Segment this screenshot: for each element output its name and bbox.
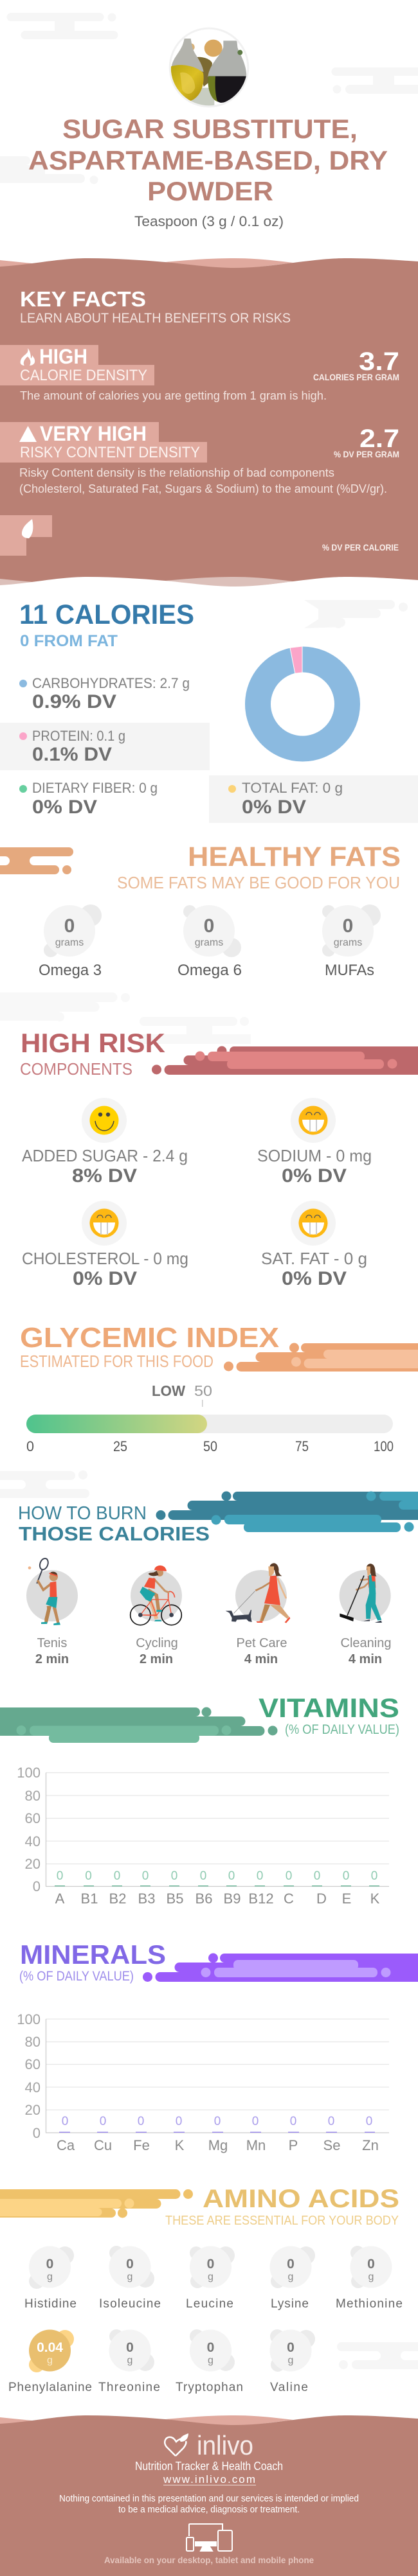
subheading: healthy fats: SOME FATS MAY BE GOOD FOR YOU xyxy=(117,873,400,892)
stat: dv per gram: 2.7 xyxy=(359,425,399,453)
bar chart: minerals: Mn xyxy=(246,2137,266,2153)
amino: tryptophan: Tryptophan xyxy=(176,2381,243,2394)
fat: omega 3 xyxy=(39,904,102,979)
amino: phenylalanine: 0.04 xyxy=(37,2340,63,2355)
fat: omega 6: Omega 6 xyxy=(177,962,242,979)
amino: tryptophan: 0 xyxy=(207,2340,214,2355)
activity: tennis: Tenis xyxy=(37,1636,67,1650)
legend: dietary fiber: 0% DV xyxy=(32,797,97,818)
bar chart: vitamins: 0 xyxy=(228,1869,235,1883)
bar chart: vitamins: K xyxy=(370,1891,380,1907)
title: POWDER xyxy=(147,176,273,206)
activity: tennis: 2 min xyxy=(35,1652,69,1666)
background decoration: high risk clouds xyxy=(0,992,251,1044)
glycemic value label: 50 xyxy=(194,1382,212,1399)
bar chart: minerals: 0 xyxy=(33,2125,41,2141)
background decoration: amino cloud xyxy=(337,2342,418,2369)
decoration: minerals bars xyxy=(143,1953,418,1982)
amino: histidine: Histidine xyxy=(24,2297,77,2311)
icon: woman walking dog xyxy=(226,1563,290,1623)
legend: total fat: TOTAL FAT: 0 g xyxy=(242,780,343,796)
legend: protein: 0.1% DV xyxy=(32,744,112,765)
logo: heart with leaf xyxy=(165,2433,188,2456)
amino: threonine: 0 xyxy=(126,2340,134,2355)
decoration: glycemic bars xyxy=(224,1343,418,1372)
heading: key facts: KEY FACTS xyxy=(20,287,146,311)
panel: footer xyxy=(0,2415,418,2576)
bar chart: minerals: 0 xyxy=(252,2115,259,2128)
risky content badge xyxy=(0,422,207,463)
bar chart: vitamins: B5 xyxy=(167,1891,183,1907)
bar chart: minerals: 80 xyxy=(25,2034,41,2050)
bar chart: vitamins: B3 xyxy=(138,1891,155,1907)
disclaimer: Nothing contained in this presentation and our services is intended or implied xyxy=(59,2493,359,2504)
text: risky content explanation: (Cholesterol, Saturated Fat, Sugars & Sodium) to the amount (%DV/gr). xyxy=(19,482,387,495)
bar chart: vitamins: 0 xyxy=(114,1869,120,1883)
heading: healthy fats: HEALTHY FATS xyxy=(188,842,401,872)
bar chart: vitamins: D xyxy=(316,1891,327,1907)
decoration: vitamins bars xyxy=(0,1707,278,1743)
icon: woman sweeping xyxy=(340,1564,391,1623)
icon: leaf xyxy=(22,519,33,538)
subheading: vitamins: (% OF DAILY VALUE) xyxy=(285,1722,399,1737)
logo wordmark: inlivo xyxy=(197,2430,253,2460)
legend: carbohydrates: CARBOHYDRATES: 2.7 g xyxy=(32,675,190,691)
amino: valine: g xyxy=(288,2355,293,2366)
icon: cyclist xyxy=(131,1566,182,1625)
calorie density badge xyxy=(0,345,154,385)
disclaimer xyxy=(59,2493,359,2515)
bar chart: vitamins: 0 xyxy=(371,1869,377,1883)
bar chart: vitamins: A xyxy=(55,1891,65,1907)
stat: dv per gram: % DV PER GRAM xyxy=(334,449,399,459)
amino: methionine xyxy=(336,2246,403,2311)
bar chart: vitamins: B12 xyxy=(248,1891,274,1907)
label: calorie density: CALORIE DENSITY xyxy=(20,367,147,384)
glycemic scale labels: 50 xyxy=(203,1438,217,1454)
third badge with leaf icon xyxy=(0,515,52,556)
heading: high risk: HIGH RISK xyxy=(21,1028,165,1058)
risk item: cholesterol: CHOLESTEROL - 0 mg xyxy=(22,1249,188,1268)
amino: isoleucine: Isoleucine xyxy=(99,2297,161,2311)
bar chart: minerals: Ca xyxy=(57,2137,75,2153)
glycemic value label: LOW xyxy=(152,1382,185,1399)
amino: methionine: 0 xyxy=(367,2257,375,2272)
stat: calories per gram: CALORIES PER GRAM xyxy=(313,372,399,382)
bar chart: vitamins: 0 xyxy=(171,1869,177,1883)
bar chart: minerals: Zn xyxy=(362,2137,379,2153)
serving size: Teaspoon (3 g / 0.1 oz) xyxy=(134,213,284,229)
glycemic value label xyxy=(152,1382,212,1407)
amino: isoleucine: 0 xyxy=(126,2257,134,2272)
bar chart: minerals: 20 xyxy=(25,2102,41,2118)
stat: calories per gram xyxy=(313,348,399,382)
subheading: from fat: 0 FROM FAT xyxy=(20,632,118,650)
activity: cleaning: 4 min xyxy=(349,1652,382,1666)
legend: protein xyxy=(0,723,210,770)
decoration: healthy fats bars xyxy=(0,847,73,874)
bar chart: minerals: K xyxy=(175,2137,185,2153)
risk item: added sugar: 8% DV xyxy=(72,1165,137,1187)
amino: isoleucine xyxy=(99,2246,161,2311)
amino: isoleucine: g xyxy=(127,2272,132,2282)
heading: amino acids: AMINO ACIDS xyxy=(203,2185,399,2213)
label: very high: VERY HIGH xyxy=(40,422,147,445)
risk item: cholesterol xyxy=(22,1201,188,1289)
fat: omega 3: Omega 3 xyxy=(39,962,102,979)
donut chart xyxy=(258,646,347,749)
risk item: saturated fat: 0% DV xyxy=(282,1268,347,1289)
heading: those calories: THOSE CALORIES xyxy=(19,1522,210,1545)
bar chart: minerals: 40 xyxy=(25,2079,41,2095)
label: risky content density: RISKY CONTENT DENSITY xyxy=(20,444,200,461)
legend: carbohydrates xyxy=(19,675,190,712)
activity: tennis xyxy=(26,1557,78,1666)
amino: methionine: g xyxy=(368,2272,374,2282)
decoration: burn bars xyxy=(156,1492,418,1532)
amino: lysine: g xyxy=(288,2272,293,2282)
amino: threonine: Threonine xyxy=(98,2381,160,2394)
text: risky content explanation: Risky Content density is the relationship of bad components xyxy=(19,466,334,479)
tagline: Nutrition Tracker & Health Coach xyxy=(135,2460,283,2473)
label: high: HIGH xyxy=(39,345,87,368)
legend: dietary fiber xyxy=(19,780,158,818)
decoration: amino acid bars xyxy=(0,2189,193,2218)
bar chart: vitamins: 80 xyxy=(25,1788,41,1804)
bar chart: minerals: 0 xyxy=(138,2115,144,2128)
amino: phenylalanine: Phenylalanine xyxy=(8,2381,92,2394)
background decoration: calories cloud xyxy=(304,600,408,628)
heading: glycemic index: GLYCEMIC INDEX xyxy=(20,1322,279,1354)
bar chart: minerals: 0 xyxy=(100,2115,106,2128)
glycemic scale labels xyxy=(26,1438,394,1454)
bar chart: minerals: 0 xyxy=(62,2115,68,2128)
subheading: minerals: (% OF DAILY VALUE) xyxy=(19,1969,134,1984)
availability note: Available on your desktop, tablet and mobile phone xyxy=(104,2555,314,2565)
activity: pet care: Pet Care xyxy=(237,1636,287,1650)
bar chart: minerals: 0 xyxy=(366,2115,372,2128)
amino: tryptophan xyxy=(176,2329,243,2394)
bar chart: minerals: 100 xyxy=(17,2011,41,2027)
risk item: saturated fat: SAT. FAT - 0 g xyxy=(261,1249,367,1268)
amino: valine xyxy=(270,2329,315,2394)
activity: cycling: 2 min xyxy=(140,1652,173,1666)
amino: histidine: g xyxy=(47,2272,53,2282)
risk item: sodium: SODIUM - 0 mg xyxy=(257,1146,372,1165)
bar chart: vitamins: B1 xyxy=(81,1891,98,1907)
amino: tryptophan: g xyxy=(208,2355,214,2366)
bar chart: minerals: 60 xyxy=(25,2056,41,2072)
bar chart: minerals: Se xyxy=(323,2137,340,2153)
amino: leucine: 0 xyxy=(207,2257,214,2272)
icon: warning triangle xyxy=(19,426,37,442)
heading: vitamins: VITAMINS xyxy=(259,1693,399,1723)
legend: total fat: 0% DV xyxy=(242,797,306,818)
risk item: sodium: 0% DV xyxy=(282,1165,347,1187)
decoration: healthy fats dot xyxy=(62,865,71,874)
background decoration: burn cloud xyxy=(0,1470,89,1498)
amino: threonine: g xyxy=(127,2355,132,2366)
bar chart: vitamins: B2 xyxy=(109,1891,126,1907)
disclaimer: to be a medical advice, diagnosis or treatment. xyxy=(118,2504,300,2515)
amino: valine: Valine xyxy=(270,2381,308,2394)
legend: dietary fiber: DIETARY FIBER: 0 g xyxy=(32,780,158,796)
risk item: sodium xyxy=(257,1098,372,1187)
amino: leucine xyxy=(186,2246,235,2311)
stat: dv per gram xyxy=(334,425,399,459)
bar chart: vitamins: 0 xyxy=(343,1869,349,1883)
heading: calories: 11 CALORIES xyxy=(19,599,194,630)
amino: lysine: 0 xyxy=(287,2257,295,2272)
bar chart: minerals: Cu xyxy=(94,2137,112,2153)
fat: omega 3: 0 xyxy=(64,915,75,937)
fat: mufas: 0 xyxy=(343,915,353,937)
panel: key facts xyxy=(0,258,418,586)
glycemic scale labels: 25 xyxy=(113,1438,127,1454)
risk item: cholesterol: 0% DV xyxy=(73,1268,137,1289)
heading: minerals: MINERALS xyxy=(20,1939,166,1970)
bar chart: minerals: 0 xyxy=(214,2115,221,2128)
bar chart: vitamins: 0 xyxy=(257,1869,263,1883)
bar chart: minerals: Mg xyxy=(208,2137,228,2153)
bar chart: vitamins: 0 xyxy=(142,1869,149,1883)
heading: how to burn: HOW TO BURN xyxy=(18,1503,147,1524)
activity: pet care: 4 min xyxy=(244,1652,278,1666)
fat: mufas xyxy=(322,904,381,979)
subheading: glycemic: ESTIMATED FOR THIS FOOD xyxy=(20,1352,214,1371)
amino: valine: 0 xyxy=(287,2340,295,2355)
bar chart: minerals: 0 xyxy=(328,2115,334,2128)
fat: omega 3: grams xyxy=(55,937,84,948)
bar chart: vitamins: 0 xyxy=(200,1869,206,1883)
subheading: components: COMPONENTS xyxy=(20,1059,132,1079)
bar chart: vitamins: 0 xyxy=(286,1869,292,1883)
stat: calories per gram: 3.7 xyxy=(359,348,399,376)
activity: cycling xyxy=(131,1566,182,1666)
bar chart: vitamins: B9 xyxy=(224,1891,241,1907)
amino: leucine: g xyxy=(208,2272,214,2282)
risk item: added sugar: ADDED SUGAR - 2.4 g xyxy=(22,1146,188,1165)
stat: dv per calorie: % DV PER CALORIE xyxy=(322,542,399,552)
bar chart: minerals: Fe xyxy=(133,2137,150,2153)
activity: pet care xyxy=(226,1563,290,1666)
fat: omega 6 xyxy=(177,905,242,979)
bar chart: minerals: P xyxy=(289,2137,298,2153)
bar chart: minerals xyxy=(17,2011,389,2153)
decoration: high risk bars xyxy=(152,1046,418,1075)
section wave divider xyxy=(0,577,418,597)
icon: flame xyxy=(21,348,35,366)
fat: mufas: grams xyxy=(334,937,362,948)
text: risky content explanation xyxy=(19,466,387,495)
title: ASPARTAME-BASED, DRY xyxy=(28,145,388,175)
fat: omega 6: 0 xyxy=(204,915,214,937)
bar chart: minerals: 0 xyxy=(176,2115,182,2128)
activity: cleaning: Cleaning xyxy=(341,1636,391,1650)
bar chart: vitamins: 40 xyxy=(25,1833,41,1849)
amino: threonine xyxy=(98,2329,160,2394)
glycemic gauge bar xyxy=(26,1415,393,1433)
activity: cleaning xyxy=(340,1564,391,1666)
title xyxy=(28,114,388,206)
background decoration: header clouds xyxy=(0,13,418,184)
amino: lysine xyxy=(270,2246,315,2311)
legend: protein: PROTEIN: 0.1 g xyxy=(32,728,125,744)
amino: methionine: Methionine xyxy=(336,2297,403,2311)
bar chart: vitamins xyxy=(17,1765,389,1907)
glycemic scale labels: 0 xyxy=(26,1438,34,1454)
risk item: added sugar xyxy=(22,1098,188,1187)
bar chart: vitamins: 0 xyxy=(33,1878,41,1894)
activity: cycling: Cycling xyxy=(136,1636,178,1650)
website link: www.inlivo.com xyxy=(163,2473,255,2485)
bar chart: vitamins: E xyxy=(342,1891,351,1907)
bar chart: vitamins: B6 xyxy=(195,1891,212,1907)
icon: tennis player xyxy=(26,1557,78,1625)
fat: omega 6: grams xyxy=(195,937,223,948)
amino: phenylalanine: g xyxy=(47,2355,53,2366)
bar chart: vitamins: 0 xyxy=(314,1869,320,1883)
amino: lysine: Lysine xyxy=(271,2297,309,2311)
title: SUGAR SUBSTITUTE, xyxy=(62,114,358,144)
bar chart: vitamins: 0 xyxy=(85,1869,92,1883)
subheading: amino acids: THESE ARE ESSENTIAL FOR YOUR BODY xyxy=(165,2214,399,2228)
amino: histidine xyxy=(24,2246,77,2311)
bar chart: vitamins: C xyxy=(284,1891,294,1907)
bar chart: vitamins: 100 xyxy=(17,1765,41,1781)
fat: mufas: MUFAs xyxy=(325,962,374,979)
bar chart: vitamins: 0 xyxy=(57,1869,63,1883)
amino: leucine: Leucine xyxy=(186,2297,233,2311)
glycemic scale labels: 75 xyxy=(295,1438,309,1454)
bar chart: minerals: 0 xyxy=(290,2115,296,2128)
subheading: LEARN ABOUT HEALTH BENEFITS OR RISKS xyxy=(20,311,291,326)
glycemic scale labels: 100 xyxy=(374,1438,394,1454)
amino: histidine: 0 xyxy=(46,2257,53,2272)
amino: phenylalanine xyxy=(8,2329,92,2394)
risk item: saturated fat xyxy=(261,1201,367,1289)
food photo: oil bottles xyxy=(169,28,249,107)
icon: devices xyxy=(186,2524,232,2551)
legend: total fat xyxy=(209,775,418,823)
text: calorie explanation: The amount of calories you are getting from 1 gram is high. xyxy=(20,389,327,402)
bar chart: vitamins: 60 xyxy=(25,1810,41,1826)
bar chart: vitamins: 20 xyxy=(25,1856,41,1872)
legend: carbohydrates: 0.9% DV xyxy=(32,691,116,712)
